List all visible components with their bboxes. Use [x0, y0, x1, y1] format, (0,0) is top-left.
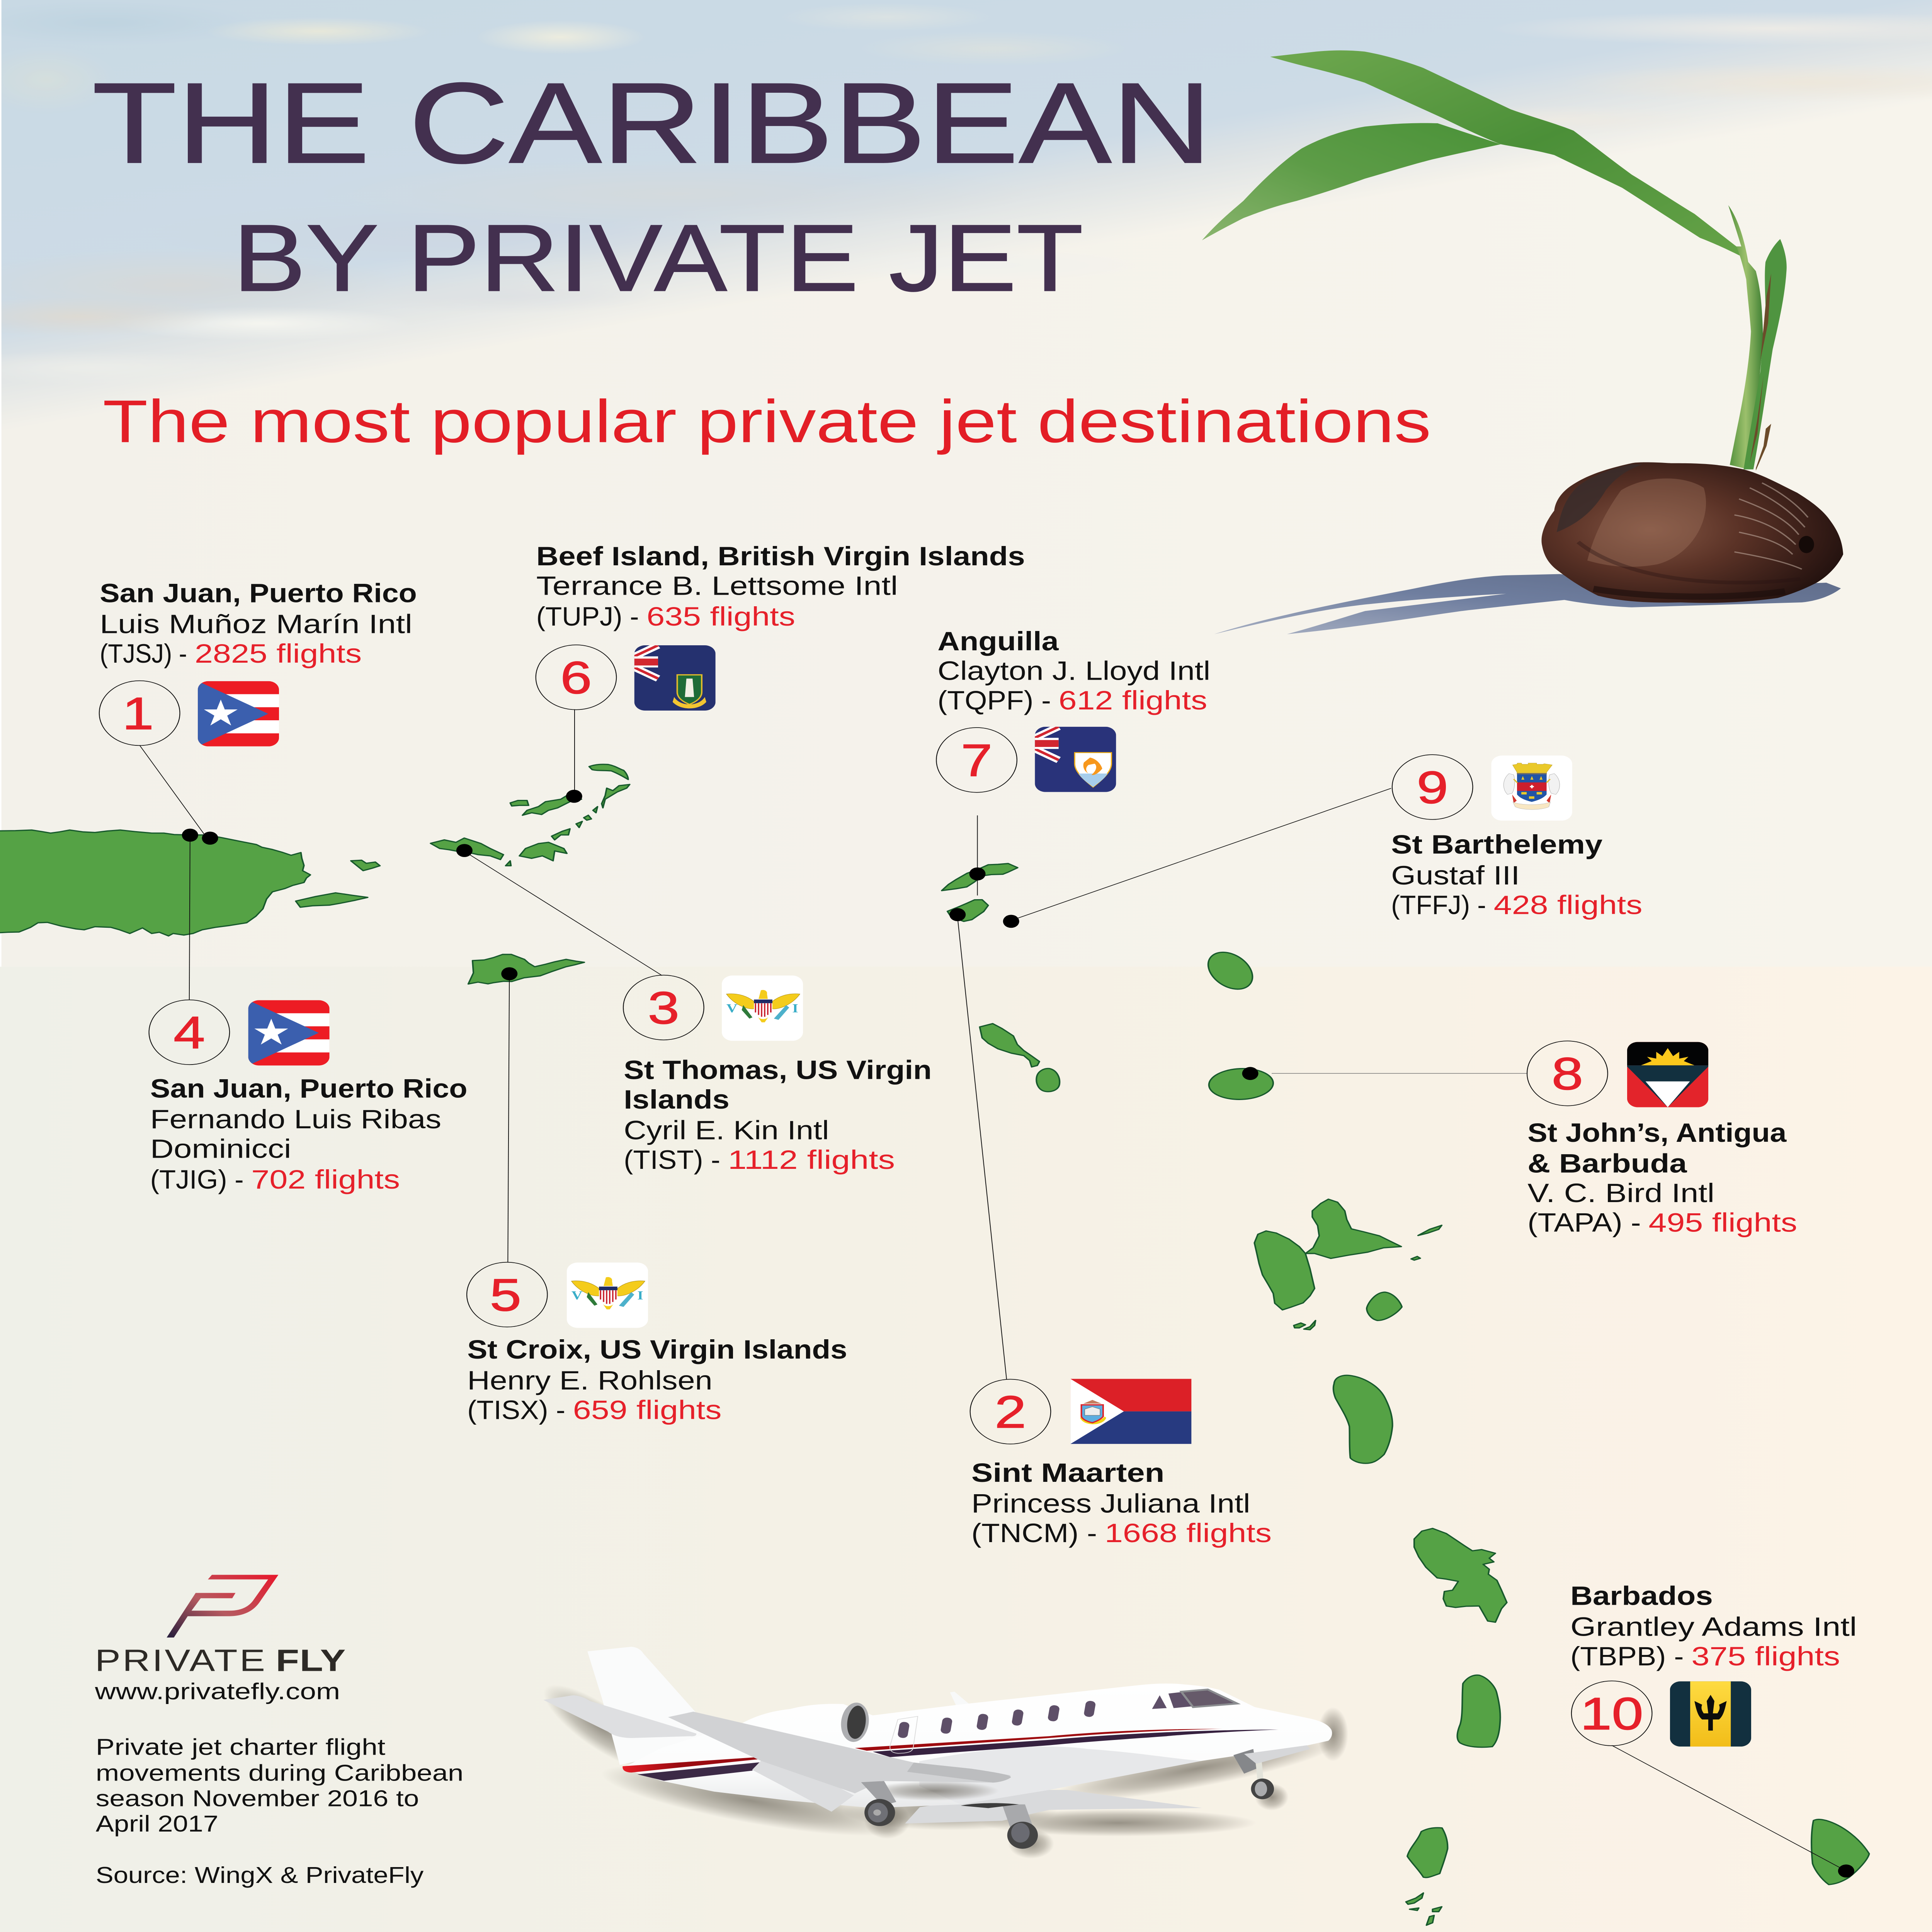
- subtitle: The most popular private jet destinations: [103, 388, 1431, 455]
- text: Sint Maarten TNCM: Sint Maarten: [971, 1458, 1164, 1488]
- flag: US Virgin Islands: [722, 976, 803, 1041]
- text: Sint Maarten TNCM: (TNCM) -: [971, 1519, 1097, 1548]
- note: data description: season November 2016 to: [96, 1786, 419, 1811]
- St Lucia: [1457, 1675, 1500, 1747]
- number badge 3: [623, 975, 704, 1040]
- title: THE CARIBBEAN: [92, 61, 1212, 187]
- background: beach photo: [0, 0, 1932, 967]
- text: St Croix TISX: (TISX) -: [467, 1395, 565, 1425]
- source: Source: WingX & PrivateFly: [96, 1863, 424, 1888]
- text: San Juan TJIG: [150, 1074, 467, 1194]
- rear stripe purple: [637, 1762, 761, 1781]
- leader line 5: [508, 973, 509, 1262]
- number badge 10: [1571, 1681, 1652, 1746]
- main landing gear near: [861, 1781, 896, 1826]
- text: St Johns TAPA: 495 flights: [1648, 1208, 1797, 1238]
- map: Anguilla to Nevis: [927, 856, 1073, 1102]
- Barbados: [1811, 1819, 1869, 1884]
- shoot: [1743, 239, 1787, 469]
- cabin door: [890, 1716, 918, 1753]
- text: Anguilla TQPF: Anguilla: [938, 627, 1059, 656]
- dorsal antenna: [950, 1692, 971, 1712]
- marker 4: [182, 828, 198, 842]
- flag: Anguilla: [1035, 727, 1116, 792]
- Barbuda: [1199, 945, 1261, 996]
- leader line 4: [189, 838, 190, 1000]
- nose gear door: [1244, 1745, 1310, 1764]
- St Maarten: [947, 900, 988, 921]
- number badge 6: [536, 645, 616, 710]
- coconut shadow: [1214, 574, 1841, 634]
- number badge 2: 2: [995, 1387, 1026, 1437]
- Martinique: [1414, 1528, 1507, 1622]
- flag: British Virgin Islands: [634, 645, 716, 711]
- flag: US Virgin Islands: V: [571, 1288, 583, 1302]
- destination 4: [138, 825, 475, 1195]
- text: St Thomas TIST: Islands: [624, 1085, 729, 1114]
- number badge 5: [467, 1262, 548, 1327]
- flag: Sint Maarten: [1070, 1379, 1191, 1444]
- number badge 9: 9: [1417, 762, 1448, 813]
- text: St Johns TAPA: (TAPA) -: [1527, 1208, 1641, 1238]
- number badge 8: 8: [1551, 1049, 1583, 1099]
- map: Puerto Rico and Virgin Islands: [0, 751, 643, 998]
- destination 9: [996, 745, 1655, 930]
- marker 7: [969, 867, 986, 880]
- Petite Terre: [1411, 1256, 1420, 1260]
- destination 6: [521, 536, 1042, 807]
- marker 8: [1242, 1067, 1259, 1080]
- marker 10: [1838, 1864, 1854, 1878]
- belly panel: [919, 1747, 1202, 1804]
- Antigua: [1208, 1067, 1274, 1100]
- cabin windows: [897, 1692, 1193, 1738]
- text: Beef Island TUPJ: 635 flights: [646, 602, 795, 631]
- flag: Barbados: [1670, 1681, 1751, 1747]
- logo: PrivateFly wordmark: PRIVATE: [95, 1644, 265, 1678]
- text: St Barthelemy TFFJ: Gustaf III: [1391, 861, 1520, 890]
- map: Eastern Caribbean islands: [1195, 936, 1884, 1927]
- number badge 8: [1527, 1041, 1608, 1106]
- small BVI cays: [551, 807, 597, 840]
- number badge 10: 10: [1580, 1689, 1643, 1739]
- text: St Barthelemy TFFJ: [1391, 830, 1643, 920]
- St Croix: [468, 954, 584, 984]
- text: San Juan TJSJ: (TJSJ) -: [100, 639, 187, 668]
- text: St Thomas TIST: (TIST) -: [624, 1145, 720, 1175]
- text: Anguilla TQPF: (TQPF) -: [938, 686, 1051, 715]
- marker 2: [949, 908, 966, 921]
- destination 1: [99, 583, 416, 845]
- horizontal stabiliser: [543, 1695, 696, 1738]
- photo: coconut seedling: [1195, 37, 1869, 646]
- flag: St Barthelemy coat of arms: [1492, 755, 1572, 821]
- leader line 3: [466, 852, 662, 976]
- number badge 1: 1: [122, 689, 154, 739]
- marker 6: [566, 790, 582, 803]
- Jost van Dyke: [510, 801, 529, 806]
- text: Anguilla TQPF: Clayton J. Lloyd Intl: [938, 656, 1210, 686]
- flag: Antigua and Barbuda: [1627, 1042, 1708, 1107]
- note: data description: April 2017: [96, 1811, 218, 1837]
- plane soft shadows: [529, 1673, 1348, 1859]
- leader line 10: [1612, 1745, 1846, 1871]
- number badge 2: [970, 1379, 1051, 1444]
- Virgin Gorda: [602, 784, 630, 808]
- wing shadow on belly: [870, 1781, 999, 1801]
- destination 3: [452, 838, 942, 1182]
- Vieques: [296, 893, 368, 907]
- text: St Thomas TIST: Cyril E. Kin Intl: [624, 1116, 829, 1145]
- text: Beef Island TUPJ: (TUPJ) -: [536, 602, 639, 631]
- text: Sint Maarten TNCM: [971, 1458, 1272, 1548]
- St John: [519, 842, 567, 861]
- text: St Thomas TIST: [624, 1055, 932, 1175]
- flag: US Virgin Islands: I: [638, 1288, 643, 1302]
- number badge 3: 3: [648, 983, 679, 1034]
- cheatline purple: [872, 1730, 1278, 1757]
- logo: PrivateFly mark: [167, 1575, 278, 1638]
- nut highlights: [1557, 464, 1814, 597]
- flap: [752, 1761, 854, 1812]
- illustration: private jet: [521, 1626, 1348, 1860]
- engine: [839, 1702, 871, 1743]
- text: San Juan TJSJ: [100, 579, 417, 668]
- text: Anguilla TQPF: [938, 627, 1210, 715]
- flag: Puerto Rico: [248, 1000, 329, 1065]
- title: [92, 59, 1212, 311]
- title block: [61, 61, 1471, 468]
- destination 7: [919, 622, 1226, 905]
- Nevis: [1036, 1068, 1060, 1092]
- text: St Croix TISX: 659 flights: [573, 1395, 722, 1425]
- Dominica: [1333, 1375, 1393, 1463]
- main wing: [668, 1712, 1011, 1793]
- number badge 4: [149, 1000, 230, 1065]
- text: St Thomas TIST: 1112 flights: [728, 1145, 895, 1175]
- far wing: [905, 1790, 1202, 1823]
- destination 2: [947, 905, 1284, 1552]
- Tortola: [522, 793, 582, 815]
- St Vincent: [1407, 1828, 1447, 1878]
- cheatline red: [855, 1729, 1223, 1751]
- number badge 5: 5: [490, 1270, 521, 1320]
- number badge 9: [1392, 755, 1473, 820]
- text: San Juan TJSJ: San Juan, Puerto Rico: [100, 579, 417, 608]
- Les Saintes: [1294, 1320, 1315, 1330]
- St Kitts: [980, 1024, 1039, 1067]
- rear stripe red: [622, 1757, 761, 1772]
- text: St Barthelemy TFFJ: St Barthelemy: [1391, 830, 1602, 859]
- leader line 8: [1272, 1073, 1527, 1074]
- windscreen: [1181, 1689, 1237, 1707]
- number badge 6: 6: [560, 653, 592, 703]
- leaf upper: [1270, 50, 1743, 257]
- text: St Johns TAPA: V. C. Bird Intl: [1527, 1179, 1714, 1208]
- text: Beef Island TUPJ: [536, 542, 1025, 631]
- text: Sint Maarten TNCM: Princess Juliana Intl: [971, 1489, 1250, 1518]
- leader line 7: [977, 815, 978, 895]
- text: San Juan TJIG: 702 flights: [251, 1165, 400, 1194]
- nose landing gear: [1233, 1749, 1274, 1799]
- text: Barbados TBPB: (TBPB) -: [1570, 1641, 1684, 1671]
- text: St Johns TAPA: & Barbuda: [1527, 1149, 1687, 1179]
- text: Anguilla TQPF: 612 flights: [1059, 686, 1207, 715]
- website url: www.privatefly.com: [95, 1679, 340, 1704]
- Puerto Rico: [0, 830, 310, 936]
- destination 8: [1233, 1035, 1808, 1244]
- nut: [1541, 462, 1843, 603]
- leader line 2: [957, 918, 1007, 1379]
- text: Barbados TBPB: 375 flights: [1691, 1641, 1840, 1671]
- stem scars: [1750, 274, 1771, 471]
- Guadeloupe: [1254, 1199, 1401, 1310]
- text: St Barthelemy TFFJ: (TFFJ) -: [1391, 890, 1486, 920]
- stem: [1728, 205, 1763, 469]
- logo: PrivateFly wordmark: FLY: [276, 1644, 346, 1678]
- text: Barbados TBPB: [1570, 1581, 1857, 1671]
- fuselage: [622, 1684, 1332, 1808]
- destination 10: [1560, 1583, 1874, 1884]
- branding and source panel: [77, 1564, 490, 1897]
- marker 1: [202, 832, 218, 845]
- destination 5: [455, 963, 861, 1425]
- text: Barbados TBPB: Grantley Adams Intl: [1570, 1612, 1857, 1641]
- tail fin: [587, 1647, 720, 1765]
- number badge 7: 7: [961, 735, 993, 786]
- text: St Croix TISX: [467, 1335, 847, 1425]
- text: San Juan TJSJ: Luis Muñoz Marín Intl: [100, 609, 412, 639]
- leader line 9: [1016, 788, 1391, 919]
- number badge 4: 4: [173, 1007, 205, 1058]
- text: San Juan TJIG: (TJIG) -: [150, 1165, 243, 1194]
- Culebra: [351, 860, 380, 871]
- note: data description: [96, 1735, 463, 1837]
- leaf lower: [1202, 123, 1501, 240]
- text: St Croix TISX: Henry E. Rohlsen: [467, 1366, 713, 1395]
- Marie-Galante: [1367, 1292, 1402, 1320]
- text: San Juan TJIG: Dominicci: [150, 1134, 291, 1163]
- number badge 7: [936, 728, 1017, 793]
- main landing gear far: [961, 1803, 1038, 1849]
- logo: PrivateFly wordmark: [95, 1644, 346, 1678]
- marker 3: [456, 844, 472, 857]
- text: St Johns TAPA: [1527, 1118, 1797, 1238]
- title: BY PRIVATE JET: [233, 205, 1083, 311]
- St Thomas: [430, 838, 511, 866]
- number badge 1: [99, 681, 180, 745]
- Anegada: [589, 764, 628, 780]
- note: data description: Private jet charter flight: [96, 1735, 385, 1760]
- flag: Puerto Rico: [197, 681, 279, 747]
- note: data description: movements during Caribbean: [96, 1760, 463, 1786]
- Anguilla: [942, 864, 1018, 891]
- flag: US Virgin Islands: I: [792, 1002, 798, 1015]
- text: St Barthelemy TFFJ: 428 flights: [1494, 890, 1643, 920]
- text: San Juan TJSJ: 2825 flights: [195, 639, 362, 668]
- flag: US Virgin Islands: V: [726, 1002, 737, 1015]
- text: Beef Island TUPJ: Terrance B. Lettsome Intl: [536, 571, 898, 601]
- leader line 1: [139, 745, 204, 834]
- winglet: [907, 1762, 1011, 1782]
- Grenadines: [1406, 1893, 1442, 1925]
- flag: US Virgin Islands: [567, 1262, 648, 1328]
- text: St Johns TAPA: St John’s, Antigua: [1527, 1118, 1787, 1148]
- text: Sint Maarten TNCM: 1668 flights: [1105, 1519, 1272, 1548]
- text: San Juan TJIG: Fernando Luis Ribas: [150, 1105, 441, 1134]
- leader line 6: [574, 709, 575, 794]
- marker 9: [1003, 915, 1019, 928]
- La Desirade: [1418, 1225, 1442, 1235]
- marker 5: [501, 967, 517, 980]
